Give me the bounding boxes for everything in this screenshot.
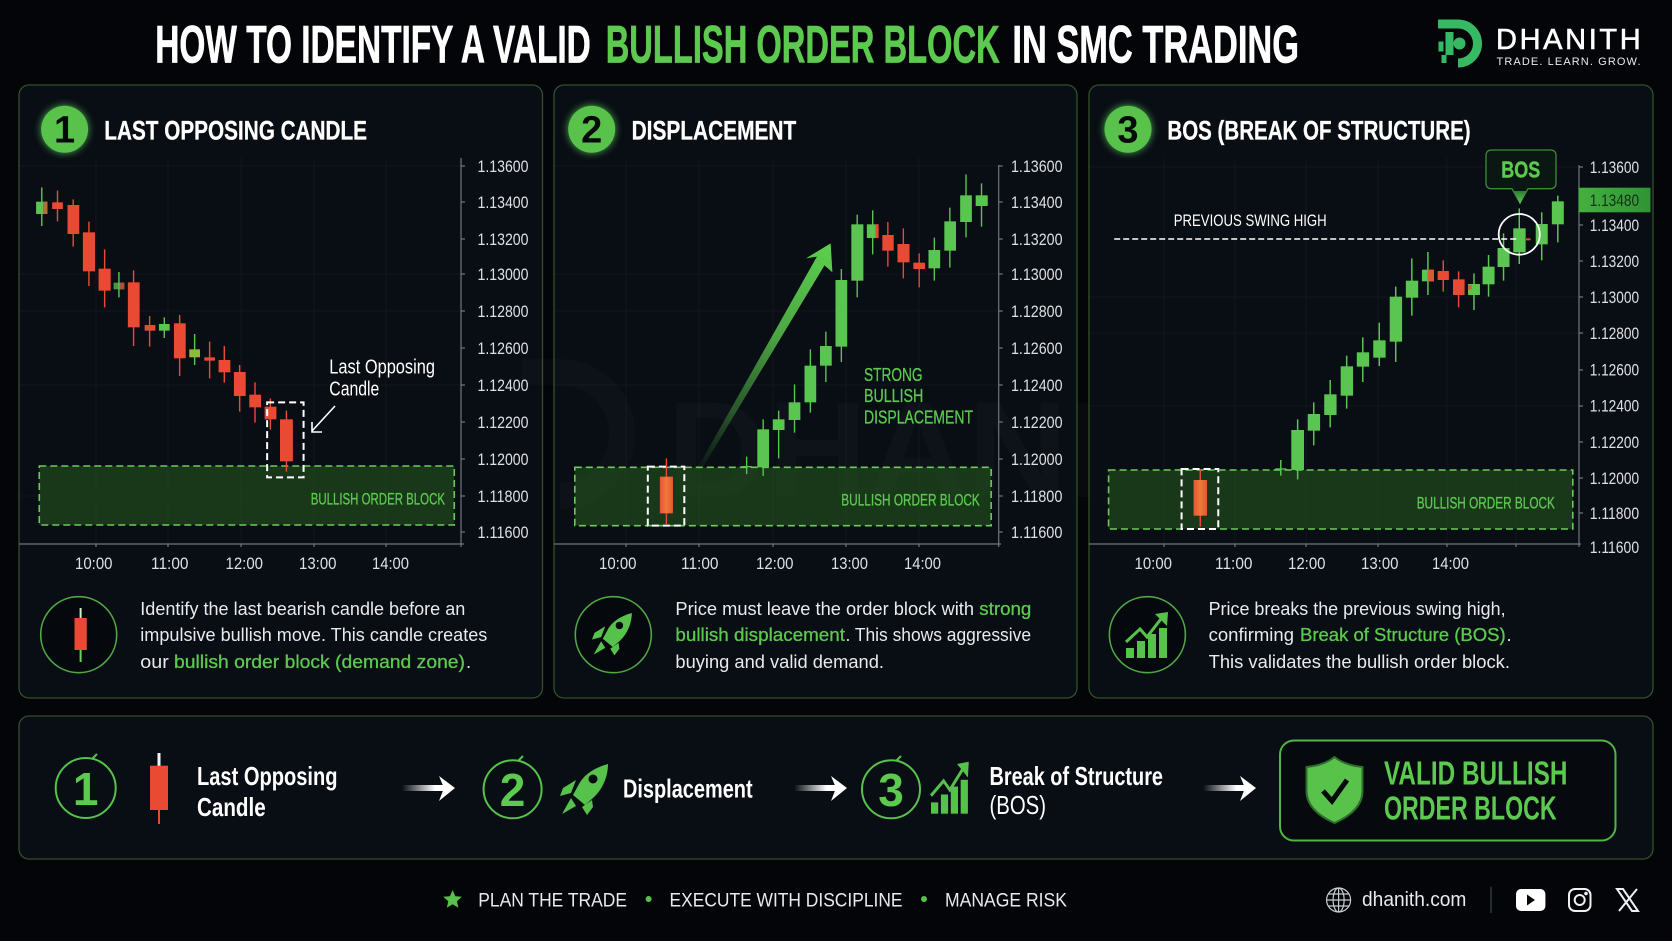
chart: bullish displacement: 1.11800: [1011, 487, 1062, 506]
text block: step 3: [1209, 598, 1512, 672]
chart: break of structure: 13:00: [1361, 554, 1398, 573]
step 1 label: [197, 761, 338, 822]
chart: bullish displacement: 1.12200: [1011, 413, 1062, 432]
step 1 number: 1: [73, 763, 98, 815]
step 2 number: [484, 756, 542, 818]
text block: step 1: [140, 598, 487, 672]
chart: bearish leg into the order block: 1.12000: [478, 450, 528, 469]
text block: step 2: Price must leave the order block with: [675, 598, 974, 619]
chart: bullish displacement: 1.13400: [1011, 193, 1062, 212]
step 2 label: Displacement: [623, 773, 753, 803]
step 1 number: [56, 754, 116, 818]
chart: break of structure: 12:00: [1288, 554, 1326, 573]
icon: youtube: [1516, 889, 1545, 911]
text block: step 3: Price breaks the previous swing high,: [1209, 598, 1506, 619]
chart: bullish displacement: 1.12000: [1011, 450, 1062, 469]
title: HOW TO IDENTIFY A VALID: [155, 16, 591, 75]
icon: candle: [41, 597, 117, 673]
icon: X: [1617, 889, 1638, 911]
chart: bearish leg into the order block: 1.13200: [478, 230, 528, 249]
heading: BOS (BREAK OF STRUCTURE): [1167, 115, 1471, 145]
chart: bearish leg into the order block: 1.11600: [478, 523, 528, 542]
label: strong bullish displacement: STRONG: [864, 364, 922, 385]
text block: step 3: .: [1506, 624, 1512, 645]
callout: last opposing candle: [312, 356, 435, 432]
chart: bullish displacement: 1.11600: [1011, 523, 1062, 542]
logo: Dhanith: DHANITH: [1496, 24, 1641, 56]
chart: bearish leg into the order block: 1.12800: [478, 302, 528, 321]
title: [155, 16, 1299, 75]
callout: BOS: BOS: [1501, 157, 1540, 183]
label: strong bullish displacement: BULLISH: [864, 385, 923, 406]
chart: break of structure: 14:00: [1432, 554, 1469, 573]
label: strong bullish displacement: DISPLACEMENT: [864, 406, 973, 427]
result: valid bullish order block: VALID BULLISH: [1384, 754, 1567, 791]
chart: break of structure: 1.13000: [1590, 288, 1639, 307]
arrow 3: [1203, 776, 1256, 801]
chart: bullish displacement: 14:00: [904, 554, 941, 573]
text block: step 1: bullish order block (demand zone): [174, 651, 465, 672]
icon: star: [443, 890, 462, 908]
chart: bearish leg into the order block: 11:00: [151, 554, 188, 573]
chart: bearish leg into the order block: 1.13000: [478, 265, 528, 284]
footer: taglines: PLAN THE TRADE: [478, 891, 627, 912]
badge 1: 1: [54, 110, 75, 152]
chart: bullish displacement: [554, 157, 1062, 573]
text block: step 2: strong: [979, 598, 1031, 619]
text block: step 2: . This shows aggressive: [846, 624, 1031, 645]
text block: step 3: Break of Structure (BOS): [1300, 624, 1506, 645]
chart: bearish leg into the order block: BULLISH ORDER BLOCK: [311, 489, 445, 508]
chart: bearish leg into the order block: 13:00: [299, 554, 336, 573]
footer: taglines: EXECUTE WITH DISCIPLINE: [670, 891, 902, 912]
chart: bullish displacement: 1.13000: [1011, 265, 1062, 284]
chart: bearish leg into the order block: 1.13400: [478, 193, 528, 212]
panel: last opposing candle: [19, 85, 542, 698]
text block: step 2: bullish displacement: [675, 624, 845, 645]
chart: bearish leg into the order block: 1.13600: [478, 157, 528, 176]
icon: rocket: [560, 764, 608, 815]
chart: break of structure: 1.13400: [1590, 216, 1639, 235]
footer: website: [1327, 888, 1466, 912]
text block: step 3: confirming: [1209, 624, 1294, 645]
panel: summary flow: [19, 716, 1653, 859]
chart: bearish leg into the order block: 1.12600: [478, 339, 528, 358]
text block: step 1: our: [140, 651, 169, 672]
text block: step 1: impulsive bullish move. This candle creates: [140, 624, 487, 645]
chart: break of structure: [1089, 158, 1650, 573]
icon: growth chart: [1109, 597, 1185, 673]
label: strong bullish displacement: [864, 364, 973, 427]
chart: break of structure: 11:00: [1215, 554, 1252, 573]
icon: globe: [1327, 888, 1351, 912]
chart: break of structure: 1.13600: [1590, 158, 1639, 177]
text block: step 1: Identify the last bearish candle before an: [140, 598, 465, 619]
step 3 label: (BOS): [990, 790, 1046, 820]
badge 2: [568, 106, 615, 153]
chart: break of structure: 1.12000: [1590, 469, 1639, 488]
step 1 label: Last Opposing: [197, 761, 338, 791]
arrow: displacement: [696, 243, 832, 470]
text block: step 2: [675, 598, 1031, 672]
arrow 1: [402, 776, 455, 801]
step 3 label: [990, 761, 1163, 820]
chart: bullish displacement: 12:00: [756, 554, 794, 573]
chart: break of structure: 10:00: [1134, 554, 1172, 573]
step 3 number: 3: [878, 764, 904, 816]
chart: bullish displacement: 13:00: [831, 554, 868, 573]
chart: bullish displacement: 1.13200: [1011, 230, 1062, 249]
footer: website: dhanith.com: [1362, 889, 1466, 911]
text block: step 3: This validates the bullish order block.: [1209, 651, 1510, 672]
logo: Dhanith: TRADE. LEARN. GROW.: [1496, 56, 1640, 68]
chart: bearish leg into the order block: 12:00: [226, 554, 263, 573]
chart: break of structure: 1.12200: [1590, 433, 1639, 452]
icon: rocket: [575, 597, 651, 673]
logo: Dhanith: [1438, 24, 1641, 68]
label: previous swing high: PREVIOUS SWING HIGH: [1174, 211, 1327, 230]
footer: social icons: [1491, 887, 1638, 913]
callout: BOS: [1486, 150, 1556, 204]
result: valid bullish order block: [1280, 740, 1616, 840]
callout: last opposing candle: Last Opposing: [329, 356, 435, 378]
step 2 number: 2: [500, 764, 525, 816]
text block: step 2: buying and valid demand.: [675, 651, 884, 672]
heading: DISPLACEMENT: [632, 115, 797, 145]
callout: last opposing candle: Candle: [329, 379, 379, 401]
badge 3: [1104, 106, 1152, 153]
chart: bullish displacement: 1.12600: [1011, 339, 1062, 358]
badge 2: 2: [581, 110, 602, 152]
chart: bearish leg into the order block: 10:00: [75, 554, 112, 573]
chart: bearish leg into the order block: 1.12400: [478, 376, 528, 395]
chart: break of structure: 1.12600: [1590, 360, 1639, 380]
panel: break of structure: [1089, 85, 1653, 698]
footer: taglines: MANAGE RISK: [945, 891, 1067, 912]
title: IN SMC TRADING: [1012, 16, 1299, 75]
chart: bullish displacement: 1.12400: [1011, 376, 1062, 395]
chart: bullish displacement: BULLISH ORDER BLOCK: [841, 490, 980, 509]
icon: growth chart: [931, 762, 969, 814]
step 1 label: Candle: [197, 792, 266, 822]
chart: bullish displacement: 1.12800: [1011, 302, 1062, 321]
footer: taglines: [443, 890, 1067, 912]
chart: break of structure: 1.12400: [1590, 396, 1639, 416]
chart: bullish displacement: 10:00: [599, 554, 636, 573]
chart: bearish leg into the order block: [19, 157, 528, 573]
watermark: DHANITH: [667, 374, 1291, 527]
chart: break of structure: 1.13200: [1590, 252, 1639, 271]
chart: bearish leg into the order block: 1.11800: [478, 487, 528, 506]
chart: bearish leg into the order block: 1.12200: [478, 413, 528, 432]
step 3 number: [862, 756, 920, 818]
heading: LAST OPPOSING CANDLE: [104, 115, 367, 145]
step 3 label: Break of Structure: [990, 761, 1163, 791]
chart: break of structure: 1.12800: [1590, 324, 1639, 343]
badge 3: 3: [1117, 110, 1139, 152]
text block: step 1: .: [466, 651, 471, 672]
chart: bearish leg into the order block: 14:00: [372, 554, 409, 573]
panel: displacement: [522, 85, 1291, 698]
icon: instagram: [1569, 889, 1590, 911]
chart: break of structure: 1.13480: [1590, 191, 1639, 210]
chart: bullish displacement: 11:00: [681, 554, 718, 573]
chart: break of structure: 1.11800: [1590, 504, 1639, 523]
badge 1: [41, 106, 88, 153]
chart: bullish displacement: 1.13600: [1011, 157, 1062, 176]
title: BULLISH ORDER BLOCK: [606, 16, 1000, 75]
icon: bearish candle: [150, 753, 168, 824]
chart: break of structure: 1.11600: [1590, 538, 1639, 557]
arrow 2: [794, 776, 847, 801]
result: valid bullish order block: ORDER BLOCK: [1384, 789, 1557, 826]
icon: shield: [1306, 757, 1362, 823]
chart: break of structure: BULLISH ORDER BLOCK: [1417, 494, 1555, 513]
